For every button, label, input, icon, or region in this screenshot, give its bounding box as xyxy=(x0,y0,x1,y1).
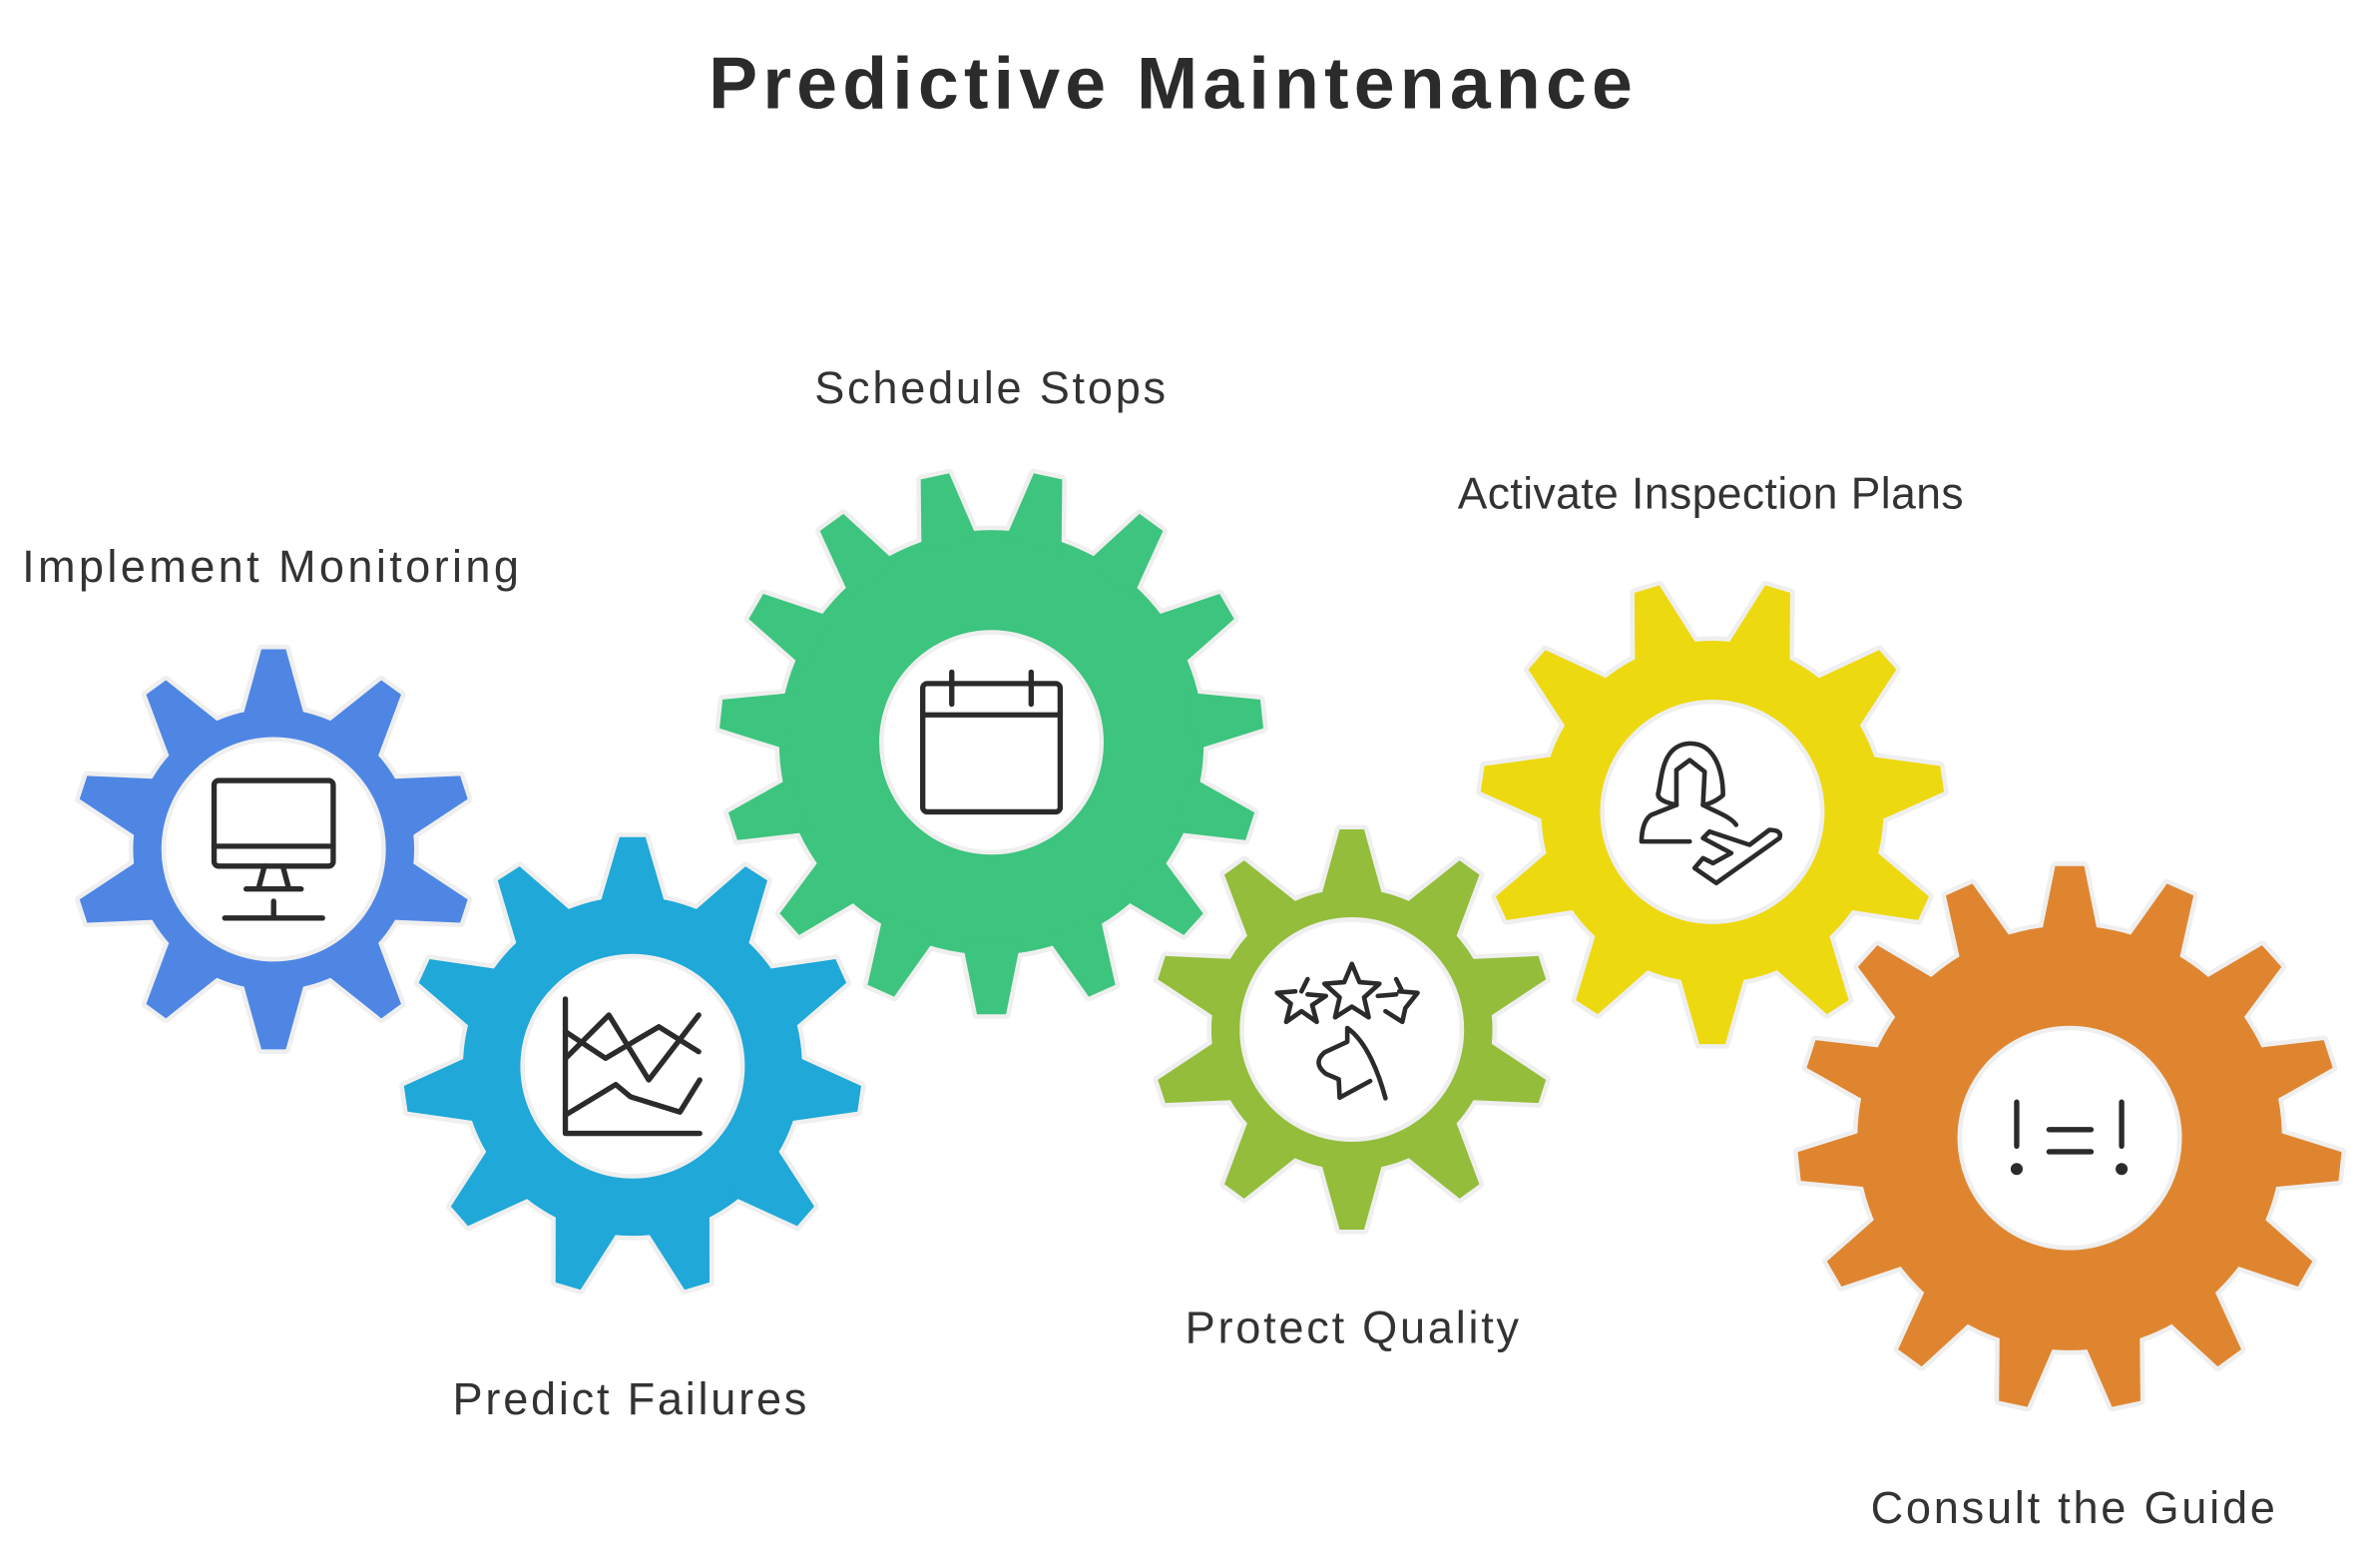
icon: person with hand xyxy=(1642,744,1780,883)
label: consult the guide: Consult the Guide xyxy=(1871,1482,2278,1533)
gear: schedule stops (green) xyxy=(718,470,1265,1014)
icon: not equal symbols xyxy=(2014,1102,2125,1173)
gear: predict failures (cyan) xyxy=(401,837,864,1296)
icon: stars and hand xyxy=(1277,964,1418,1098)
icon: monitor xyxy=(215,780,333,918)
label: implement monitoring: Implement Monitoring xyxy=(22,541,522,592)
label: schedule stops: Schedule Stops xyxy=(814,362,1169,413)
label: protect quality: Protect Quality xyxy=(1186,1301,1522,1352)
gear: consult the guide (orange) xyxy=(1745,815,2380,1461)
label: predict failures: Predict Failures xyxy=(453,1373,809,1424)
icon: line chart xyxy=(566,999,700,1134)
title: Predictive Maintenance xyxy=(709,42,1638,125)
gear: implement monitoring (blue) xyxy=(74,649,474,1049)
gear: activate inspection plans (yellow) xyxy=(1478,580,1947,1044)
icon: calendar xyxy=(923,672,1060,811)
label: activate inspection plans: Activate Inspection Plans xyxy=(1458,470,1964,519)
gear: protect quality (lime) xyxy=(1152,829,1552,1230)
